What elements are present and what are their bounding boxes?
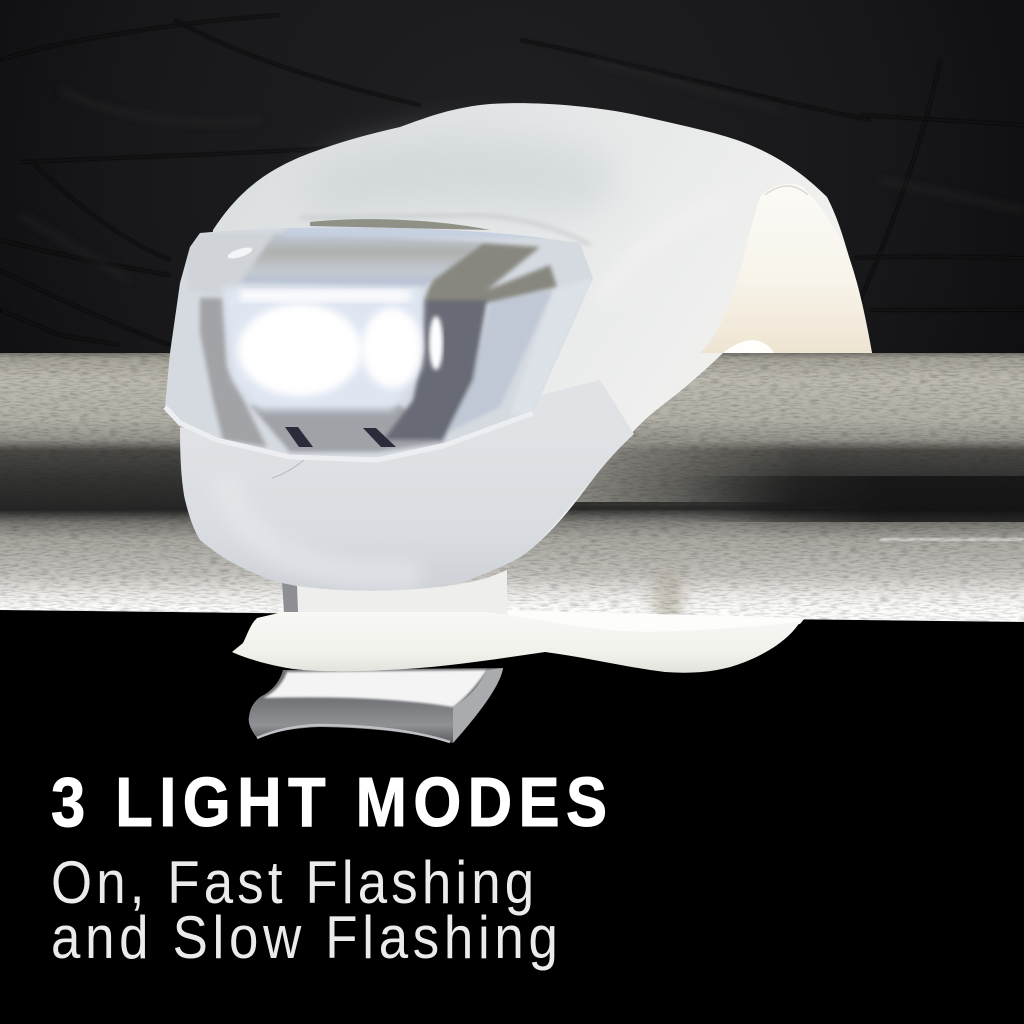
LED glow	[223, 287, 423, 410]
lens shell	[165, 227, 593, 457]
lens interior	[185, 226, 593, 452]
title: 3 LIGHT MODES	[51, 762, 607, 841]
LED contacts	[285, 427, 313, 447]
lower lip	[165, 407, 533, 460]
light: clear lens with LEDs	[165, 219, 593, 460]
light: main silicone body	[200, 103, 872, 550]
strap	[232, 612, 800, 673]
connector	[282, 570, 507, 614]
subtitle line two: and Slow Flashing	[51, 904, 558, 971]
handlebar tube	[0, 350, 1024, 632]
white tube edge above strap	[500, 610, 805, 636]
light: bottom hook and strap	[232, 570, 805, 743]
light: lower silicone housing	[180, 380, 634, 593]
subtitle line one: On, Fast Flashing	[51, 849, 534, 916]
hook	[249, 668, 503, 743]
